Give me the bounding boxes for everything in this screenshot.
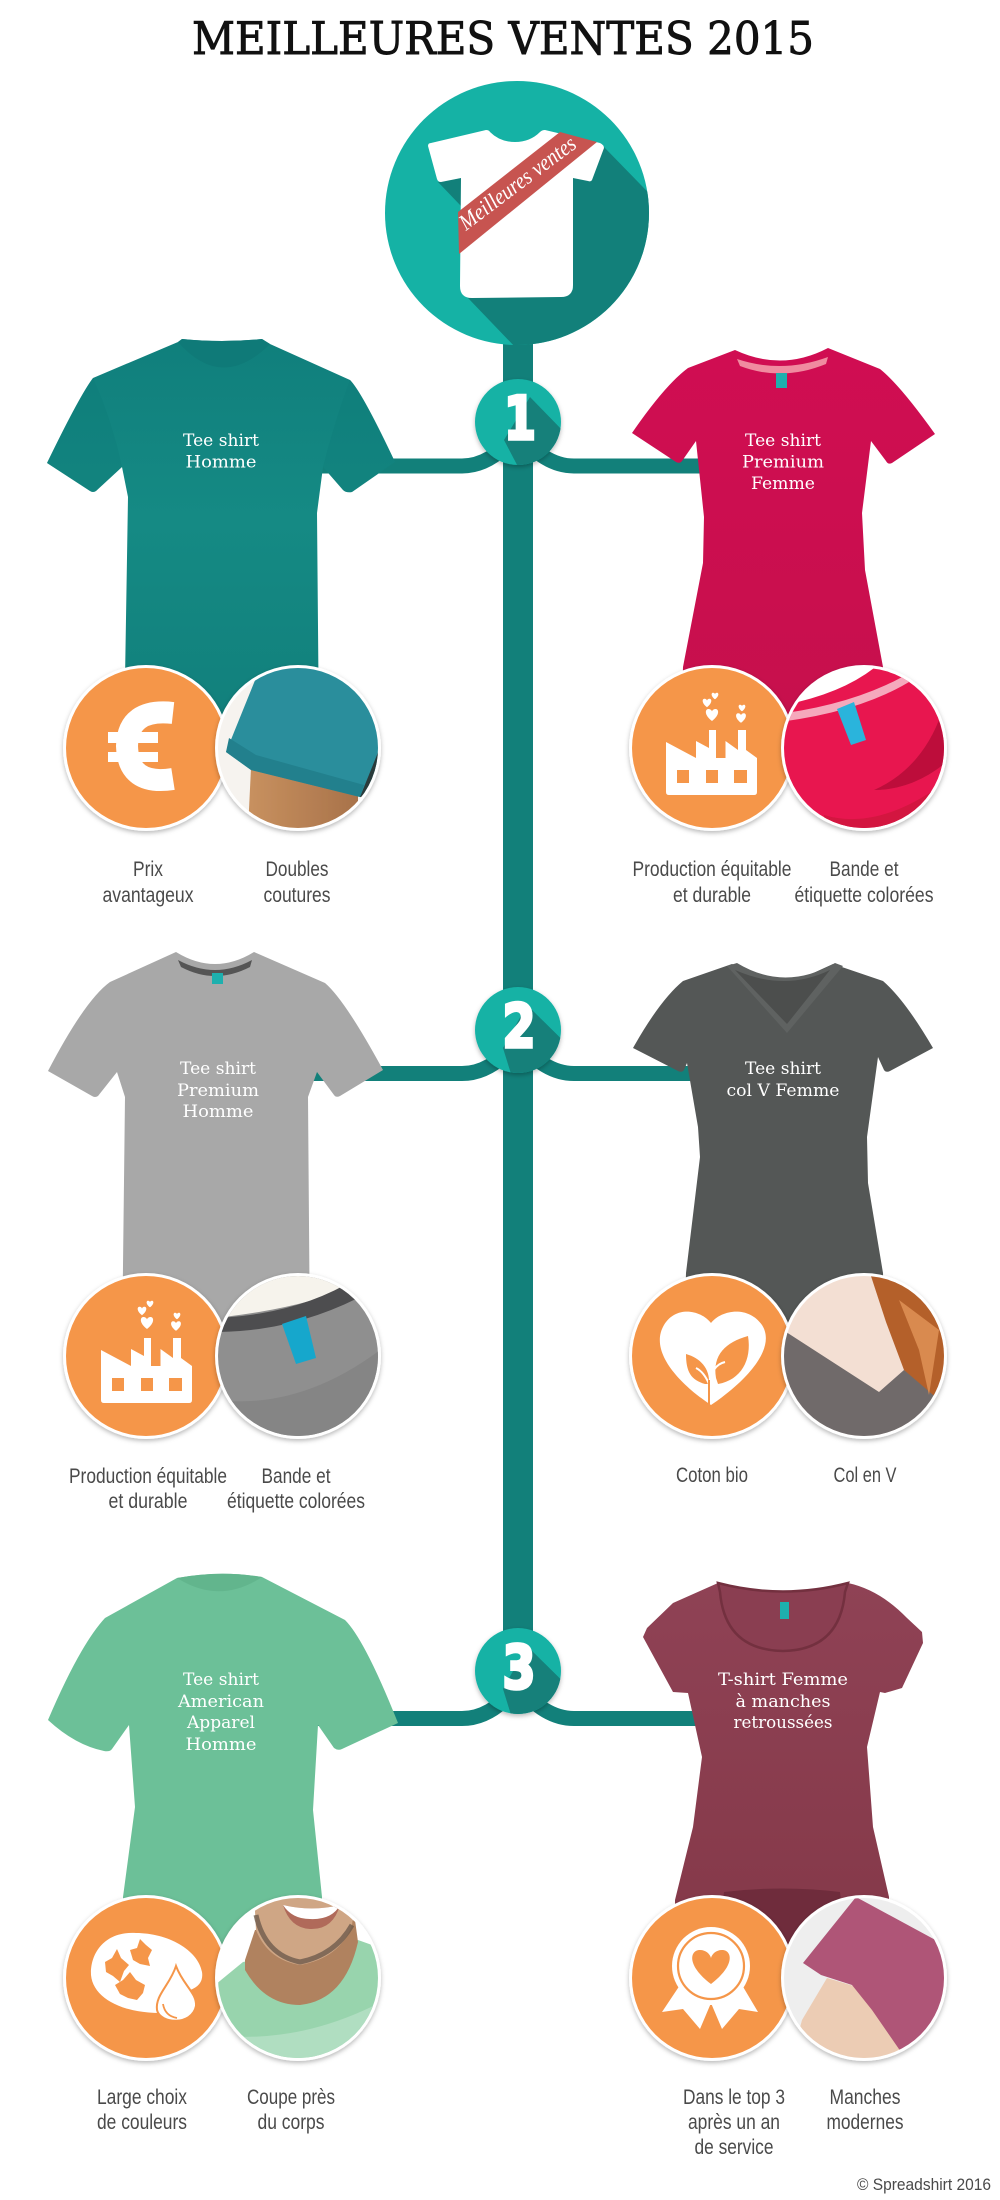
caption: Coton bio: Coton bio xyxy=(676,1464,748,1487)
shirt label xyxy=(742,431,824,494)
shirt: mint men's tee xyxy=(48,1574,398,1970)
shirt label xyxy=(718,1670,848,1733)
shirt label: col V Femme xyxy=(726,1081,840,1101)
caption: Bande et étiquette colorées xyxy=(227,1465,365,1513)
shirt label: Premium xyxy=(177,1081,259,1101)
shirt label: Homme xyxy=(186,452,256,472)
shirt label: Homme xyxy=(186,1735,256,1755)
shirt: charcoal v-neck xyxy=(633,963,933,1350)
shirt label xyxy=(183,431,259,472)
caption: Doubles coutures: Doubles xyxy=(266,858,328,881)
shirt label: Tee shirt xyxy=(180,1059,256,1079)
photo: smiling man in mint tee xyxy=(215,1890,385,2066)
panel: Tee shirt Premium Homme xyxy=(48,952,385,1513)
number badge 1: 1 xyxy=(504,384,536,454)
caption: Production équitable et durable: Production équitable xyxy=(69,1465,227,1488)
icon: euro xyxy=(63,665,229,831)
caption: Bande et étiquette colorées: étiquette colorées xyxy=(227,1490,365,1513)
caption: Coupe près du corps xyxy=(247,2086,335,2134)
icon: fair factory xyxy=(63,1273,229,1439)
shirt label xyxy=(726,1059,840,1101)
icon: bestseller badge with white tee and sash xyxy=(385,81,649,345)
copyright: © Spreadshirt 2016 xyxy=(857,2175,991,2194)
number badge 3: 3 xyxy=(502,1633,536,1703)
shirt label: Tee shirt xyxy=(183,1670,259,1690)
shirt label: Premium xyxy=(742,452,824,472)
caption: Manches modernes xyxy=(826,2086,904,2134)
caption: Bande et étiquette colorées xyxy=(794,858,934,907)
shirt label: Tee shirt xyxy=(745,431,821,451)
number badge 1 xyxy=(472,379,564,468)
caption: Coupe près du corps: Coupe près xyxy=(247,2086,335,2109)
caption: Production équitable et durable xyxy=(632,858,792,907)
icon: bestseller badge with white tee and sash: Meilleures ventes xyxy=(453,131,581,236)
shirt: heather gray men's tee xyxy=(48,952,383,1350)
caption: Dans le top 3 après un an de service: de service xyxy=(694,2136,774,2159)
caption: Production équitable et durable xyxy=(69,1465,227,1513)
shirt: teal men's tee xyxy=(47,339,395,740)
caption: Dans le top 3 après un an de service xyxy=(683,2086,785,2159)
caption: Production équitable et durable: et durable xyxy=(673,884,751,907)
photo: gray collar and tag xyxy=(215,1270,385,1446)
panel: Tee shirt Homme xyxy=(47,339,395,907)
panel: T-shirt Femme à manches retroussées xyxy=(629,1583,954,2159)
caption: Bande et étiquette colorées: étiquette colorées xyxy=(794,884,934,907)
caption: Prix avantageux xyxy=(102,858,194,907)
shirt: burgundy rolled sleeve tee xyxy=(643,1583,923,1970)
photo: v neck xyxy=(779,1270,954,1446)
caption: Doubles coutures xyxy=(264,858,330,907)
caption: Dans le top 3 après un an de service: après un an xyxy=(688,2111,780,2134)
caption: Production équitable et durable: Production équitable xyxy=(632,858,792,881)
timeline: vertical line and branches xyxy=(220,340,780,1718)
icon: award ribbon with heart xyxy=(629,1895,795,2061)
panel: Tee shirt Premium Femme xyxy=(629,348,954,907)
shirt label: retroussées xyxy=(734,1713,832,1733)
panel: Tee shirt col V Femme xyxy=(629,963,954,1487)
shirt label: à manches xyxy=(736,1692,830,1712)
shirt label: Apparel xyxy=(186,1713,255,1733)
caption: Coupe près du corps: du corps xyxy=(258,2111,324,2134)
caption: Large choix de couleurs: de couleurs xyxy=(97,2111,187,2134)
number badge 2 xyxy=(472,987,564,1076)
shirt label xyxy=(177,1670,264,1755)
caption: Col en V: Col en V xyxy=(834,1464,896,1487)
caption: Large choix de couleurs: Large choix xyxy=(97,2086,187,2109)
photo: colored band and tag xyxy=(779,660,954,840)
title: MEILLEURES VENTES 2015 xyxy=(192,12,814,65)
caption: Large choix de couleurs xyxy=(97,2086,187,2134)
caption: Prix avantageux: avantageux xyxy=(102,884,194,907)
caption: Doubles coutures: coutures xyxy=(264,884,330,907)
caption: Manches modernes: modernes xyxy=(826,2111,904,2134)
photo: double stitched sleeve xyxy=(212,665,384,836)
icon: organic cotton heart xyxy=(629,1273,795,1439)
number badge 3 xyxy=(472,1628,564,1718)
panel: Tee shirt American Apparel Homme xyxy=(48,1574,398,2134)
shirt label: Tee shirt xyxy=(745,1059,821,1079)
shirt label: Femme xyxy=(751,474,815,494)
caption: Bande et étiquette colorées: Bande et xyxy=(830,858,899,881)
shirt: pink women's tee xyxy=(632,348,935,740)
number badge 2: 2 xyxy=(502,992,536,1062)
icon: fair factory xyxy=(629,665,795,831)
icon: color palette xyxy=(63,1895,229,2061)
shirt label: American xyxy=(177,1692,264,1712)
caption: Production équitable et durable: et durable xyxy=(108,1490,188,1513)
shirt label: Tee shirt xyxy=(183,431,259,451)
caption: Dans le top 3 après un an de service: Dans le top 3 xyxy=(683,2086,785,2109)
caption: Manches modernes: Manches xyxy=(830,2086,900,2109)
shirt label: Homme xyxy=(182,1102,254,1122)
caption: Prix avantageux: Prix xyxy=(133,858,163,881)
photo: rolled sleeve xyxy=(779,1890,954,2070)
shirt label: T-shirt Femme xyxy=(718,1670,848,1690)
caption: Bande et étiquette colorées: Bande et xyxy=(262,1465,331,1488)
shirt label xyxy=(177,1059,259,1122)
